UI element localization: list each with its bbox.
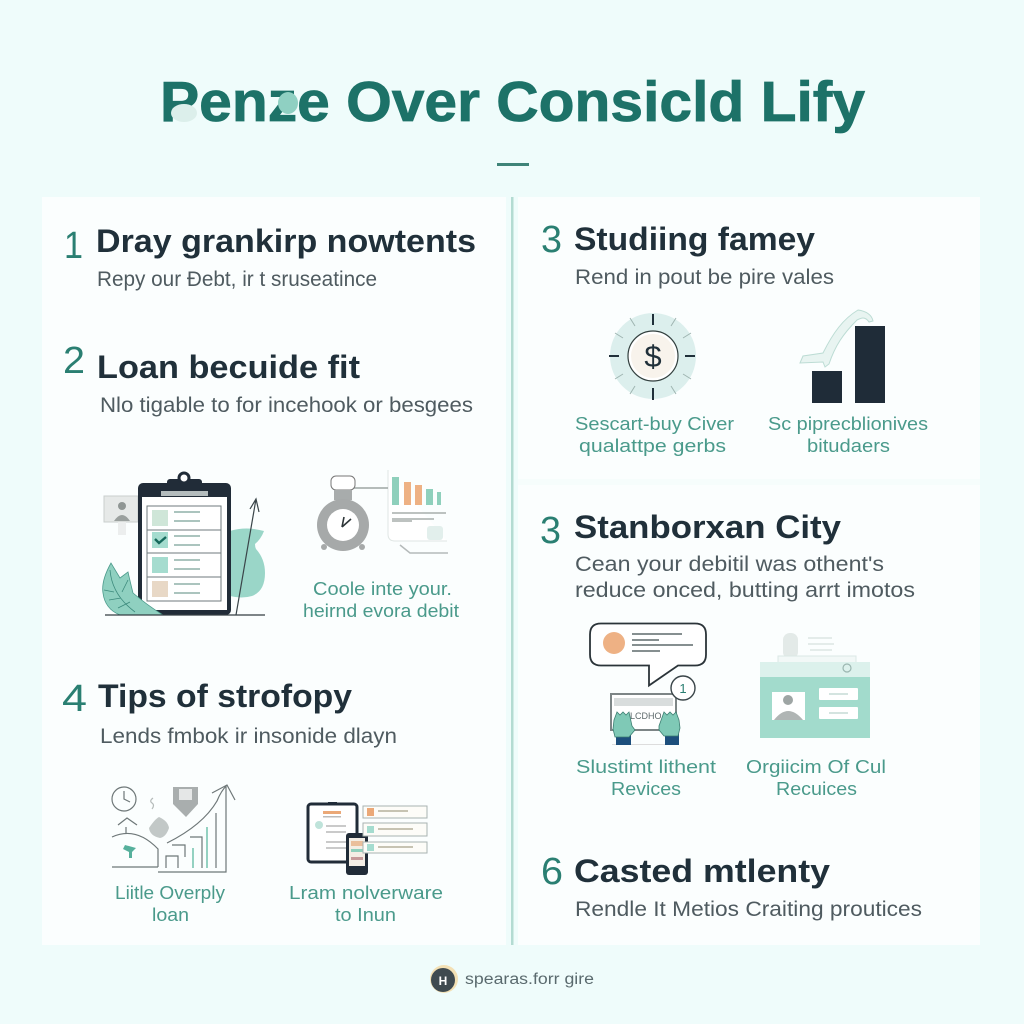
section 3 heading: 3 [541,219,562,261]
icon: dollar coin [609,313,696,400]
caption: clock: Coole inte your. [313,578,452,599]
section 3b heading: reduce onced, butting arrt imotos [575,579,915,602]
section 2 heading: Loan becuide fit [97,349,360,385]
icon: web window [760,633,870,738]
section 6 heading [541,851,922,921]
caption: dollar coin: Sescart-buy Civer [575,413,734,434]
icon: dollar coin: $ [644,339,662,374]
section 1 heading [64,223,476,291]
icon: growth chart [112,785,235,872]
icon: bar chart with ribbon [800,310,885,403]
section 4 heading: Tips of strofopy [98,678,352,714]
section 3 heading: Rend in pout be pire vales [575,266,834,289]
caption: web window [746,756,886,799]
caption: growth chart [115,882,226,925]
section 6 heading: Rendle It Metios Craiting proutices [575,898,922,921]
title [160,70,865,166]
section 3b heading [540,509,915,602]
footer logo and label: spearas.forr gire [465,971,594,988]
section 2 heading: 2 [63,340,85,382]
caption: dollar coin: qualattpe gerbs [579,435,726,456]
icon: clipboard checklist [103,473,265,615]
section 3b heading: Stanborxan City [574,509,841,545]
section 4 heading: 4 [62,678,87,720]
icon: alarm clock and report [317,470,448,553]
caption: growth chart: loan [152,904,189,925]
footer logo and label: H [439,974,447,988]
section 3b heading: 3 [540,510,561,552]
section 4 heading: Lends fmbok ir insonide dlayn [100,725,397,748]
caption: tablet and phone [289,882,443,925]
section 3 heading [541,219,834,289]
caption: speech bubble: Slustimt lithent [576,756,716,777]
caption: bar chart: Sc piprecblionives [768,413,928,434]
caption: clock: heirnd evora debit [303,600,459,621]
section 2 heading: Nlo tigable to for incehook or besgees [100,394,473,417]
caption: bar chart: bitudaers [807,435,890,456]
caption: speech bubble: Revices [611,778,681,799]
caption: tablet and phone: to Inun [335,904,396,925]
caption: dollar coin [575,413,734,456]
panel: left column [42,197,506,945]
section 1 heading: 1 [64,225,83,267]
caption: clock [303,578,459,621]
caption: bar chart [768,413,928,456]
section 4 heading [62,678,397,748]
icon: tablet and phone [308,802,427,875]
caption: speech bubble [576,756,716,799]
caption: growth chart: Liitle Overply [115,882,226,903]
footer logo and label [430,965,594,993]
section 2 heading [63,340,473,417]
caption: tablet and phone: Lram nolverware [289,882,443,903]
panel: right column [518,197,980,945]
section 3 heading: Studiing famey [574,221,815,257]
section 3b heading: Cean your debitil was othent's [575,553,884,576]
section 1 heading: Repy our Ɖebt, ir t sruseatince [97,268,377,291]
caption: web window: Recuices [776,778,857,799]
icon: speech bubble and laptop [590,624,706,745]
section 6 heading: Casted mtlenty [574,853,830,889]
icon: speech bubble and laptop: 1 [679,681,687,696]
icon: speech bubble and laptop: LCDHO [630,711,662,721]
section 6 heading: 6 [541,851,563,893]
section 1 heading: Dray grankirp nowtents [96,223,476,259]
caption: web window: Orgiicim Of Cul [746,756,886,777]
title: Penze Over Consicld Lify [160,70,865,134]
